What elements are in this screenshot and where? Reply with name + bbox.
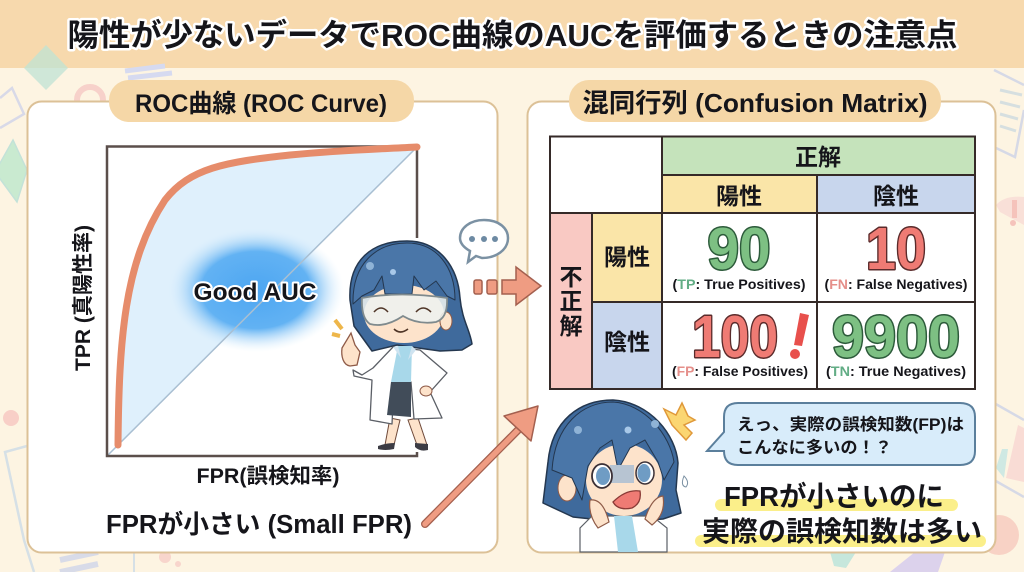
cell: TP [672,216,806,292]
icon: speech bubble with dots [460,220,508,262]
x axis label: FPR(誤検知率) [196,465,340,488]
skirt [387,382,411,417]
title banner [0,0,1024,68]
conclusion text: FPRが小さいのに [724,480,944,512]
label: Good AUC: Good AUC [194,279,317,306]
panel: confusion matrix [528,80,996,552]
ROC chart [107,146,423,456]
header: 陰性 column: 陰性 [873,183,919,209]
cell: FN: (FN: False Negatives) [824,276,968,292]
shirt [391,346,412,382]
arrow: character to matrix [474,267,541,305]
open mouth [613,491,640,509]
character: shocked scientist [543,400,695,552]
cell: TN: 9900 [832,304,960,370]
speech bubble: surprise: こんなに多いの！？ [737,437,892,457]
cell: TP: (TP: True Positives) [672,276,806,292]
header: 正解: 正解 [795,144,841,170]
confusion matrix table [550,136,975,389]
header: 不正解 [560,264,582,339]
coat [580,516,667,552]
row: 陽性: 陽性 [604,244,650,270]
speech bubble: surprise [707,403,975,465]
goggles [362,294,447,325]
hair back [350,241,472,351]
speech bubble: surprise: えっ、実際の誤検知数(FP)は [737,415,964,434]
hands [590,496,664,528]
sparkle marks [332,320,342,336]
arrow: small FPR to FP cell [425,406,538,524]
cell: FP: 100 [692,304,778,370]
panel heading: ROC curve: ROC曲線 (ROC Curve) [135,90,387,118]
conclusion text: 実際の誤検知数は多い [702,516,982,547]
cell: FN [824,216,968,292]
row: 陰性: 陰性 [604,329,650,355]
lab coat [353,347,447,424]
hair back [543,400,681,522]
panel heading: ROC curve [109,80,414,122]
panel: ROC curve [28,80,498,552]
exclamation burst [664,403,695,440]
header: 不正解: 正 [560,288,582,314]
sweat drop [682,476,688,487]
header: 不正解: 不 [560,264,582,290]
hair front [552,402,674,500]
gloom [610,465,634,483]
panel heading: confusion matrix: 混同行列 (Confusion Matrix) [582,88,928,118]
Small FPR label: FPRが小さい (Small FPR) [106,510,412,539]
character: happy scientist [332,241,472,451]
legs and shoes [385,418,427,445]
header: 不正解: 解 [560,313,582,339]
face [364,285,444,343]
hair front [353,243,455,304]
eyes [592,464,612,488]
cell: FN: 10 [866,216,926,282]
conclusion text [695,480,986,547]
face [586,444,662,516]
cell: FP [672,304,809,379]
shirt [614,516,638,552]
cell: TP: 90 [708,216,770,282]
cell: TN: (TN: True Negatives) [826,363,966,379]
y axis label: TPR (真陽性率) [72,225,95,371]
hand and hip hand [342,333,360,366]
header: 陽性 column: 陽性 [716,183,762,209]
title banner: 陽性が少ないデータでROC曲線のAUCを評価するときの注意点 [68,18,958,53]
smile eyes and mouth [374,308,431,332]
panel heading: confusion matrix [569,80,941,122]
cell: FP: (FP: False Positives) [672,363,808,379]
